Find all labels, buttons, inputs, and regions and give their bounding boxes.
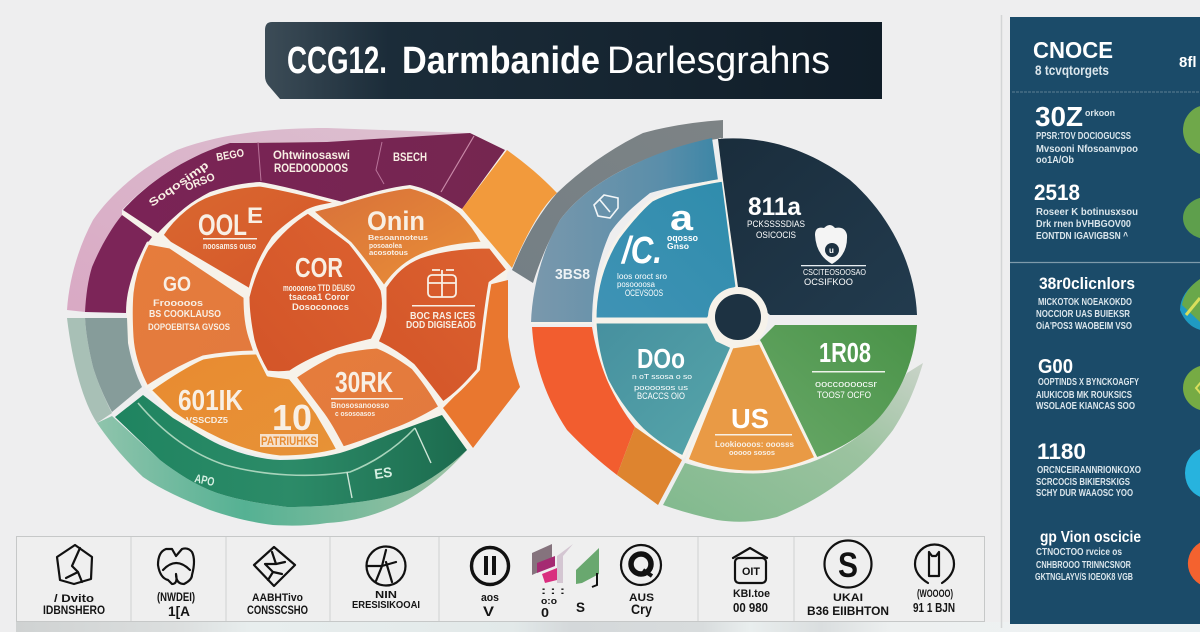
slice: blue — [595, 180, 737, 319]
slice: blue: posoooosa — [617, 280, 656, 289]
segment: bottom left — [150, 353, 338, 457]
sidebar panel — [1010, 17, 1200, 624]
segment: bottom left: VSSCDZ5 — [186, 415, 228, 425]
icon 8: 00 980 — [733, 601, 768, 615]
pie hub — [708, 287, 768, 347]
segment: right: BOC RAS ICES — [410, 311, 475, 322]
slice: green: TOOS7 OCFO — [817, 390, 871, 401]
sidebar item 6: GKTNGLAYV/S IOEOK8 VGB — [1035, 572, 1133, 583]
icon 2 — [157, 548, 195, 619]
segment: left: Frooooos — [153, 298, 203, 308]
band: purple top: Ohtwinosaswi — [273, 150, 350, 162]
slice: blue: loos oroct sro — [617, 272, 668, 281]
slice: navy: OCSIFKOO — [804, 277, 853, 288]
icon 6: coloured bars — [532, 544, 599, 620]
icon 9: UKAI — [833, 592, 863, 604]
icon 5: V — [483, 603, 495, 619]
segment: outer orange top right — [462, 150, 557, 268]
slice: orange — [687, 343, 816, 472]
icon 1 — [43, 545, 105, 617]
slice: teal: poooosos us — [634, 383, 688, 392]
sidebar item 5: 1180 — [1037, 439, 1086, 464]
title banner: Darmbanide — [402, 40, 600, 82]
slice: teal — [595, 322, 732, 457]
band: grey — [85, 318, 142, 412]
icon 1: / Dvito — [54, 593, 94, 605]
segment: bottom left: 601IK — [178, 385, 243, 417]
slice: blue: OCEVSOOS — [625, 288, 663, 298]
segment: green band: ES — [373, 464, 393, 482]
sidebar item 2: 2518 — [1034, 180, 1080, 205]
sidebar item 1: oo1A/Ob — [1036, 155, 1074, 166]
icon 6: coloured bars: 0 — [541, 605, 549, 620]
icon 2: 1[A — [168, 603, 190, 619]
icon 9 — [807, 540, 889, 618]
segment: bottom right — [295, 347, 440, 448]
slice: green: 1R08 — [819, 337, 871, 368]
slice: navy: CSCITEOSOOSAO — [803, 267, 866, 277]
sidebar item 2: EONTDN IGAVIGBSN ^ — [1036, 231, 1128, 242]
icon 4: ERESISIKOOAI — [352, 599, 420, 611]
icon 2: (NWDEI) — [157, 592, 195, 604]
sidebar item 1 — [1035, 101, 1200, 166]
sidebar item 1: orkoon — [1085, 108, 1115, 119]
segment: right: DOD DIGISEAOD — [406, 320, 476, 331]
band: purple top: ORSO — [184, 171, 217, 194]
icon 1: IDBNSHERO — [43, 603, 105, 617]
right pie chart — [531, 138, 923, 522]
bottom mottled strip — [16, 622, 1200, 632]
icon 4 — [352, 546, 420, 611]
sidebar heading — [1033, 37, 1197, 78]
slice: teal: BCACCS OIO — [637, 391, 685, 401]
sidebar item 5: SCRCOCIS BIKIERSKIGS — [1036, 477, 1130, 488]
segment: outer orange lower right — [443, 280, 520, 448]
slice: dark orange — [617, 427, 682, 505]
sidebar item 6: CTNOCTOO rvcice os — [1036, 547, 1122, 558]
sidebar item 4: AIUKICOB MK ROUKSICS — [1036, 390, 1132, 401]
slice: blue: oqosso — [667, 233, 698, 243]
segment: top right: Besoannoteus — [368, 235, 428, 242]
sidebar item 4: WSOLAOE KIANCAS SOO — [1036, 401, 1135, 412]
sidebar item 2: Roseer K botinusxsou — [1036, 207, 1138, 218]
icon 4: NIN — [375, 590, 397, 601]
sidebar item 2 — [1034, 180, 1200, 242]
slice: navy: PCKSSSSDIAS — [747, 219, 805, 230]
segment: top left: E — [247, 203, 263, 228]
segment: top right: Onin — [367, 206, 425, 236]
sidebar item 4 — [1036, 356, 1200, 412]
segment: bottom right: Bnososanoosso — [331, 400, 389, 410]
icon 10: 91 1 BJN — [913, 601, 955, 615]
icon 9: B36 EIIBHTON — [807, 604, 889, 618]
slice: navy — [718, 138, 917, 315]
segment: center — [248, 212, 384, 373]
sidebar item 1: PPSR:TOV DOCIOGUCSS — [1036, 131, 1131, 142]
icon 8: KBI.toe — [733, 588, 770, 600]
slice: green — [760, 325, 917, 457]
segment: bottom left: PATRIUHKS — [261, 434, 317, 448]
segment: right — [377, 247, 508, 403]
sidebar item 4: G00 — [1038, 356, 1073, 378]
band: purple top: BSECH — [393, 150, 427, 164]
title banner: CCG12. — [287, 40, 387, 82]
sidebar item 5: ORCNCEIRANNRIONKOXO — [1037, 465, 1141, 476]
segment: top left: noosamss ouso — [203, 241, 256, 251]
sidebar item 3 — [1036, 274, 1200, 332]
sidebar item 3: OiA'POS3 WAOBEIM VSO — [1036, 321, 1132, 332]
light green outer ring — [663, 363, 923, 522]
sidebar heading: 8 tcvqtorgets — [1035, 62, 1109, 78]
sidebar item 5 — [1036, 439, 1200, 499]
segment: left — [131, 243, 255, 387]
segment: top left: OOL — [198, 209, 247, 242]
slice: orange: ooooo sosos — [729, 448, 775, 457]
sidebar item 6: gp Vion oscicie — [1040, 529, 1141, 546]
segment: center: moooonso TTD DEUSO — [283, 283, 355, 293]
slice: blue: Gnso — [667, 242, 689, 251]
icon 6: coloured bars: S — [576, 599, 585, 615]
outer ring: pale grey green — [67, 318, 112, 423]
band: purple top — [123, 133, 505, 233]
segment: green band — [115, 395, 467, 507]
slice: blue: /C. — [620, 230, 662, 272]
band: purple left — [85, 215, 152, 313]
outer ring: teal — [97, 416, 467, 526]
sidebar item 2: Drk rnen bVHBGOV00 — [1036, 219, 1131, 230]
cream backing — [122, 133, 508, 470]
sidebar item 5: SCHY DUR WAAOSC YOO — [1036, 488, 1133, 499]
sidebar heading: 8fl — [1179, 54, 1197, 71]
segment: center: COR — [295, 252, 343, 283]
sidebar item 3: 38r0clicnlors — [1039, 274, 1135, 293]
segment: top left — [162, 185, 340, 290]
icon 3: CONSSCSHO — [247, 603, 308, 617]
segment: left: BS COOKLAUSO — [149, 309, 221, 320]
sidebar heading: CNOCE — [1033, 37, 1113, 63]
segment: top right: posoaolea — [369, 241, 403, 250]
sidebar item 6 — [1035, 529, 1200, 587]
slice: orange: US — [731, 403, 769, 434]
grey arc behind pie — [512, 120, 723, 283]
band: purple top: ROEDOODOOS — [274, 163, 348, 175]
band: purple top: BEGO — [215, 147, 245, 164]
segment: bottom left: 10 — [272, 397, 312, 438]
segment: center: tsacoa1 Coror — [289, 292, 349, 302]
sidebar item 4: OOPTINDS X BYNCKOAGFY — [1038, 377, 1139, 388]
icon 6: coloured bars: o:o — [541, 596, 558, 606]
sidebar item 3: MICKOTOK NOEAKOKDO — [1038, 297, 1132, 308]
slice: blue: a — [670, 197, 694, 238]
icon 8: OIT — [742, 566, 760, 578]
icon 7: Cry — [631, 601, 652, 617]
sidebar item 1: 30Z — [1035, 101, 1083, 132]
outer ring: pink — [67, 128, 468, 312]
slice: navy: u — [829, 246, 834, 255]
icon 7 — [621, 545, 661, 617]
icon 7: AUS — [629, 592, 654, 604]
icon 3 — [247, 547, 308, 617]
icon 5: aos — [481, 592, 499, 604]
band: purple top: Soqosimp — [147, 159, 211, 209]
title banner: Darlesgrahns — [607, 40, 830, 82]
segment: green band: APO — [193, 471, 216, 489]
segment: top right — [312, 187, 483, 287]
segment: left: GO — [163, 273, 191, 296]
slice: teal: n oT ssosa o so — [632, 372, 692, 381]
segment: bottom right: c ososoasos — [335, 411, 375, 418]
sidebar item 6: CNHBROOO TRINNCSNOR — [1036, 560, 1132, 571]
icon 10: (WOOOO) — [917, 588, 953, 600]
icon 5 — [472, 548, 508, 619]
icon 10 — [913, 544, 955, 615]
slice: orange: Lookioooos: ooosss — [715, 439, 794, 449]
slice: navy: OSICOCIS — [756, 230, 796, 241]
slice: teal: DOo — [637, 343, 685, 374]
icon 9: S — [838, 546, 858, 585]
slice: grey blue outer: 3BS8 — [555, 266, 590, 283]
divider beside sidebar — [1000, 15, 1002, 628]
sidebar item 1: Mvsooni Nfosoanvpoo — [1036, 144, 1138, 155]
icon strip — [16, 536, 984, 622]
title banner — [265, 22, 882, 99]
slice: navy: 811a — [748, 193, 802, 221]
segment: left: DOPOEBITSA GVSOS — [148, 322, 230, 333]
segment: center: Dosoconocs — [292, 302, 349, 312]
slice: grey blue outer — [531, 138, 723, 323]
icon 8 — [733, 548, 770, 615]
segment: top right: acosotous — [369, 250, 408, 257]
left radial diagram — [67, 128, 557, 526]
icon 6: coloured bars: : : : — [541, 586, 565, 597]
slice: green: ooccoooocsr — [815, 379, 877, 390]
sidebar item 3: NOCCIOR UAS BUIEKSR — [1036, 309, 1131, 320]
icon 3: AABHTivo — [252, 592, 303, 604]
slice: red — [532, 327, 635, 475]
segment: bottom right: 30RK — [335, 367, 393, 399]
